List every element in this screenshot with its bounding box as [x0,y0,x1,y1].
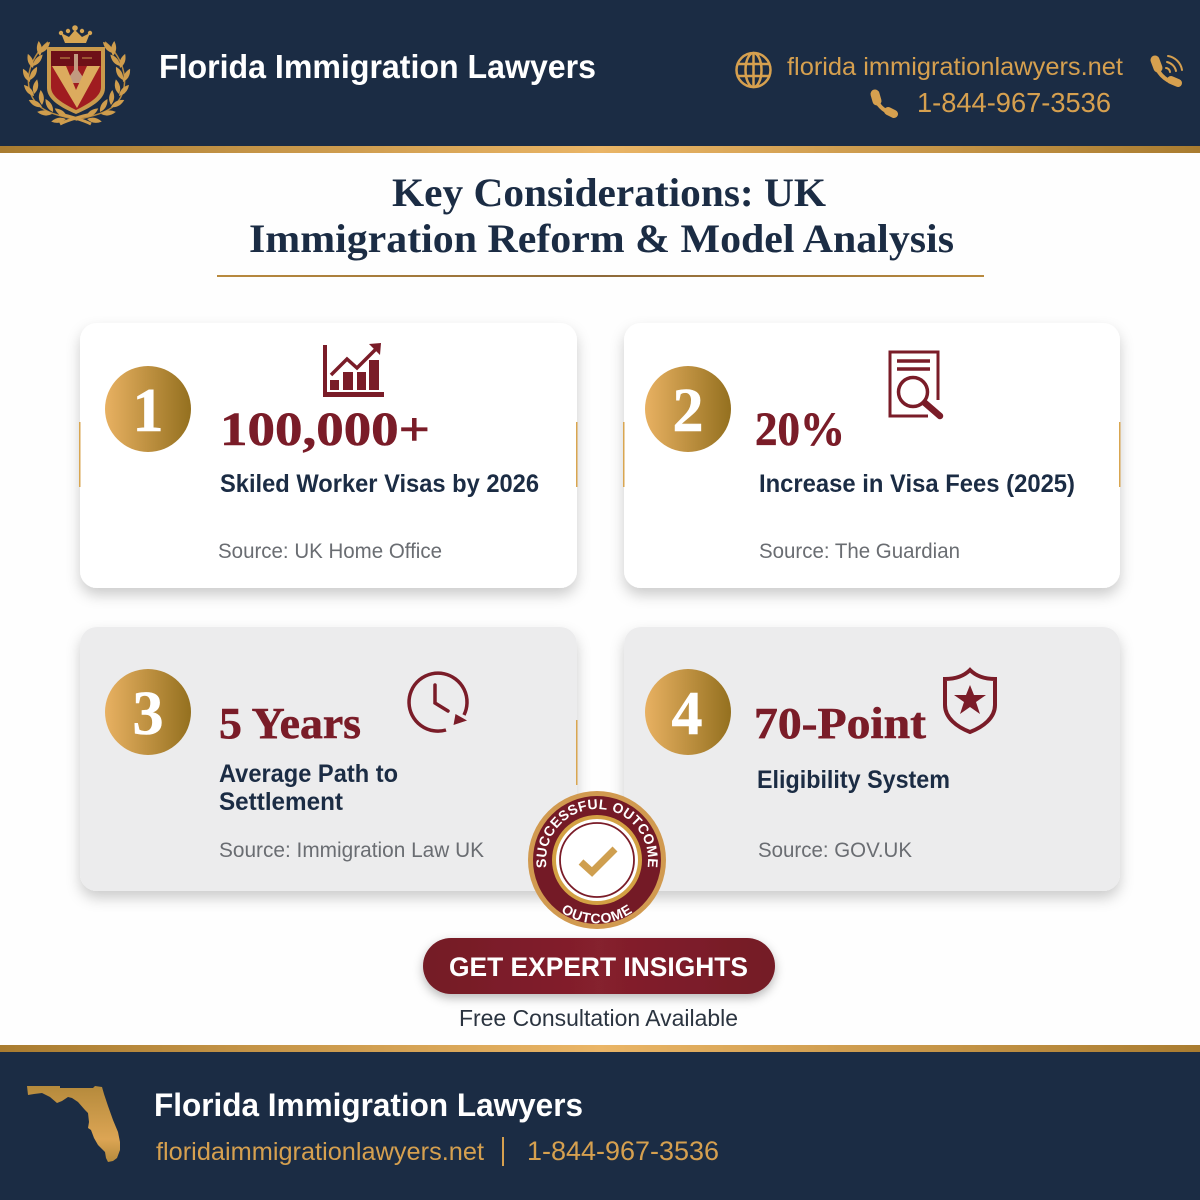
panel: card 2 visa fees [623,323,1120,588]
title rule [217,275,984,277]
source: Source: UK Home Office [218,540,442,563]
seal: successful outcome: OUTCOME [562,904,632,924]
icon: check mark [581,849,615,872]
icon: Florida map [27,1086,120,1162]
title: Immigration Reform & Model Analysis [249,216,954,261]
description: Increase in Visa Fees (2025) [759,470,1075,498]
panel: card 4 eligibility system [624,627,1120,891]
number badge 2: 2 [672,377,704,445]
panel: card 1 skilled worker visas [79,323,578,588]
stat: 100,000+ [220,403,430,456]
description: Skiled Worker Visas by 2026 [220,470,539,498]
icon: shield with star [945,670,995,732]
number badge 4: 4 [672,680,702,748]
source: Source: Immigration Law UK [219,839,484,862]
number badge 1: 1 [132,377,164,445]
description: Settlement [219,788,344,816]
seal: successful outcome [528,791,666,929]
number badge 3: 3 [132,680,164,748]
stat: 20% [755,403,845,456]
consultation note: Free Consultation Available [459,1005,738,1031]
number badge 3 [105,669,191,755]
source: Source: The Guardian [759,540,960,563]
stat: 70-Point [754,699,926,748]
description: Average Path to [219,760,398,788]
number badge 2 [645,366,731,452]
icon: clock with arrow [409,673,467,731]
header band [0,0,1200,153]
source: Source: GOV.UK [758,839,912,862]
call to action button: GET EXPERT INSIGHTS [449,952,748,982]
call to action button [423,938,775,994]
logo: crest with laurel and crown [21,25,132,124]
footer website: floridaimmigrationlawyers.net [156,1138,484,1166]
icon: globe [736,53,770,87]
icon: document with magnifier [890,352,940,416]
icon: phone [875,94,894,114]
title: Key Considerations: UK [392,170,826,215]
icon: rising bar chart [323,343,384,397]
description [219,760,398,816]
stat: 5 Years [219,699,361,748]
header website: florida immigrationlawyers.net [787,53,1123,81]
footer firm name: Florida Immigration Lawyers [154,1087,583,1123]
header firm name: Florida Immigration Lawyers [159,48,596,85]
footer phone number: 1-844-967-3536 [527,1136,719,1166]
number badge 4 [645,669,731,755]
icon: phone with signal [1155,56,1182,84]
header phone number: 1-844-967-3536 [917,87,1111,118]
title [249,170,954,261]
panel: card 3 path to settlement [80,627,578,891]
seal: successful outcome: SUCCESSFUL OUTCOME [536,799,658,868]
number badge 1 [105,366,191,452]
description: Eligibility System [757,766,950,794]
footer band [0,1045,1200,1200]
